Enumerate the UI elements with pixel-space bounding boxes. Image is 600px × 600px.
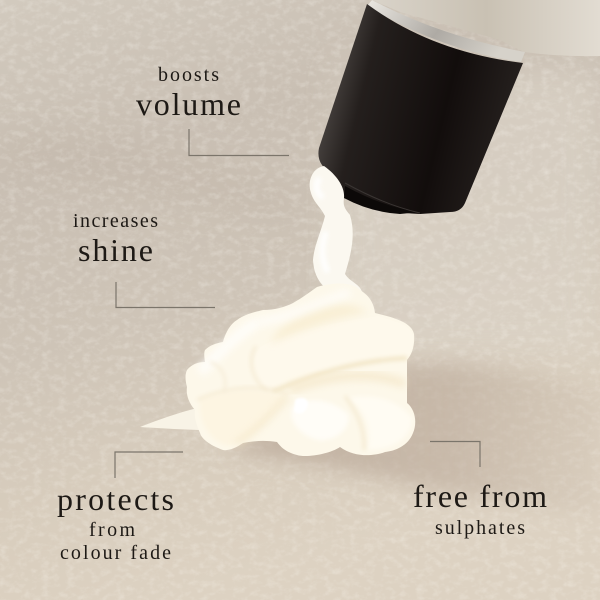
callout: protects from colour fade: colour fade: [60, 542, 171, 564]
callout: boosts volume: volume: [136, 86, 241, 122]
soft folds: [253, 316, 413, 390]
callout: protects from colour fade: from: [89, 519, 135, 541]
tube collar: [367, 0, 525, 62]
callout: increases shine: shine: [78, 232, 153, 268]
callout: free from sulphates: sulphates: [435, 517, 525, 539]
cream dollop: [140, 284, 415, 456]
callout: increases shine: increases: [73, 210, 158, 232]
callout: boosts volume: boosts: [158, 64, 219, 86]
black cap: [318, 4, 523, 214]
callout: free from sulphates: [413, 442, 547, 539]
tube body: [372, 0, 600, 56]
callout: increases shine: [73, 210, 215, 308]
callout: boosts volume: [136, 64, 289, 156]
callout: protects from colour fade: [57, 452, 183, 564]
cream strand from the nozzle: [310, 166, 362, 292]
cast shadow of the cream: [228, 364, 600, 515]
callout: protects from colour fade: protects: [57, 481, 174, 517]
callout: free from sulphates: free from: [413, 478, 547, 514]
